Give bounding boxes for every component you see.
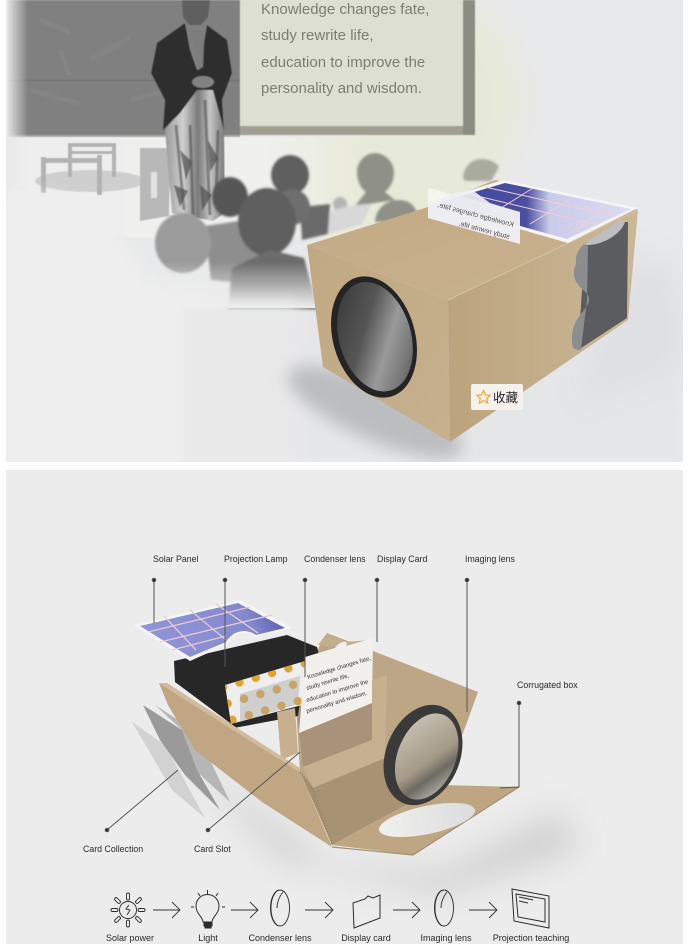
box ground shadow — [228, 794, 578, 899]
projected text on screen: study rewrite life, — [261, 27, 374, 44]
favourite button — [471, 384, 523, 410]
arrow — [153, 902, 180, 918]
flow labels: Display card — [341, 933, 391, 943]
mirrored display card: Knowledge changes fate, — [436, 202, 514, 229]
arrow — [231, 902, 258, 918]
mirrored display card — [428, 188, 520, 244]
icon: condenser lens — [270, 890, 290, 926]
flow labels: Solar power — [106, 933, 154, 943]
callout labels: Condenser lens — [304, 554, 366, 564]
corrugated box flaps — [159, 675, 519, 855]
callout labels: Display Card — [377, 554, 427, 564]
solar panel on top — [458, 180, 638, 243]
projected text on screen: Knowledge changes fate, — [261, 1, 429, 18]
callout lines — [105, 578, 521, 832]
student fade — [169, 265, 316, 308]
flow labels: Light — [198, 933, 218, 943]
flow labels: Projection teaching — [493, 933, 569, 943]
callout labels: Corrugated box — [517, 680, 578, 690]
panel: classroom scene with projector — [0, 0, 683, 480]
cardboard projector box — [307, 180, 638, 442]
display card: study rewrite life, — [306, 673, 350, 692]
cut-out hole — [379, 802, 475, 838]
process flow — [106, 889, 569, 943]
flow labels: Condenser lens — [248, 933, 312, 943]
projected text on screen: education to improve the — [261, 54, 425, 71]
front lens — [331, 276, 417, 398]
callout labels: Card Slot — [194, 844, 231, 854]
left edge fade — [7, 0, 26, 138]
floor and shadow — [240, 308, 316, 311]
flow labels — [106, 933, 569, 943]
students — [155, 153, 499, 310]
icon: light bulb — [191, 890, 225, 928]
fade to white over lower left — [41, 188, 309, 312]
display card: Knowledge changes fate, — [307, 656, 372, 681]
icon: display card — [353, 895, 380, 928]
light glow on wall — [365, 11, 521, 186]
side opening — [572, 220, 628, 350]
callout labels: Imaging lens — [465, 554, 515, 564]
mirrored display card: study rewrite life, — [458, 221, 510, 241]
callout labels: Card Collection — [83, 844, 143, 854]
lamp housing — [174, 635, 319, 728]
arrow — [305, 902, 333, 918]
projected text on screen — [261, 1, 429, 97]
callout labels: Projection Lamp — [224, 554, 288, 564]
card collection — [132, 705, 230, 818]
arrow — [393, 902, 420, 918]
solar panel — [134, 600, 292, 661]
projected text on screen: personality and wisdom. — [261, 80, 422, 97]
chairs and table — [35, 143, 173, 221]
display card: education to improve the — [306, 679, 370, 704]
back wall of box — [295, 633, 478, 788]
flow labels: Imaging lens — [420, 933, 472, 943]
imaging lens — [384, 704, 462, 806]
callout labels: Solar Panel — [153, 554, 199, 564]
icon: projection screen — [512, 889, 549, 928]
favourite button: 收藏 — [493, 391, 519, 405]
classroom photo — [8, 0, 499, 310]
callout labels — [83, 554, 578, 854]
teacher — [151, 0, 232, 221]
icon: sun — [111, 893, 145, 927]
panel: exploded diagram — [6, 470, 683, 944]
arrow — [469, 902, 497, 918]
projected screen — [240, 0, 463, 126]
icon: imaging lens — [434, 890, 454, 926]
display card: personality and wisdom. — [306, 691, 368, 715]
display card — [299, 638, 373, 733]
